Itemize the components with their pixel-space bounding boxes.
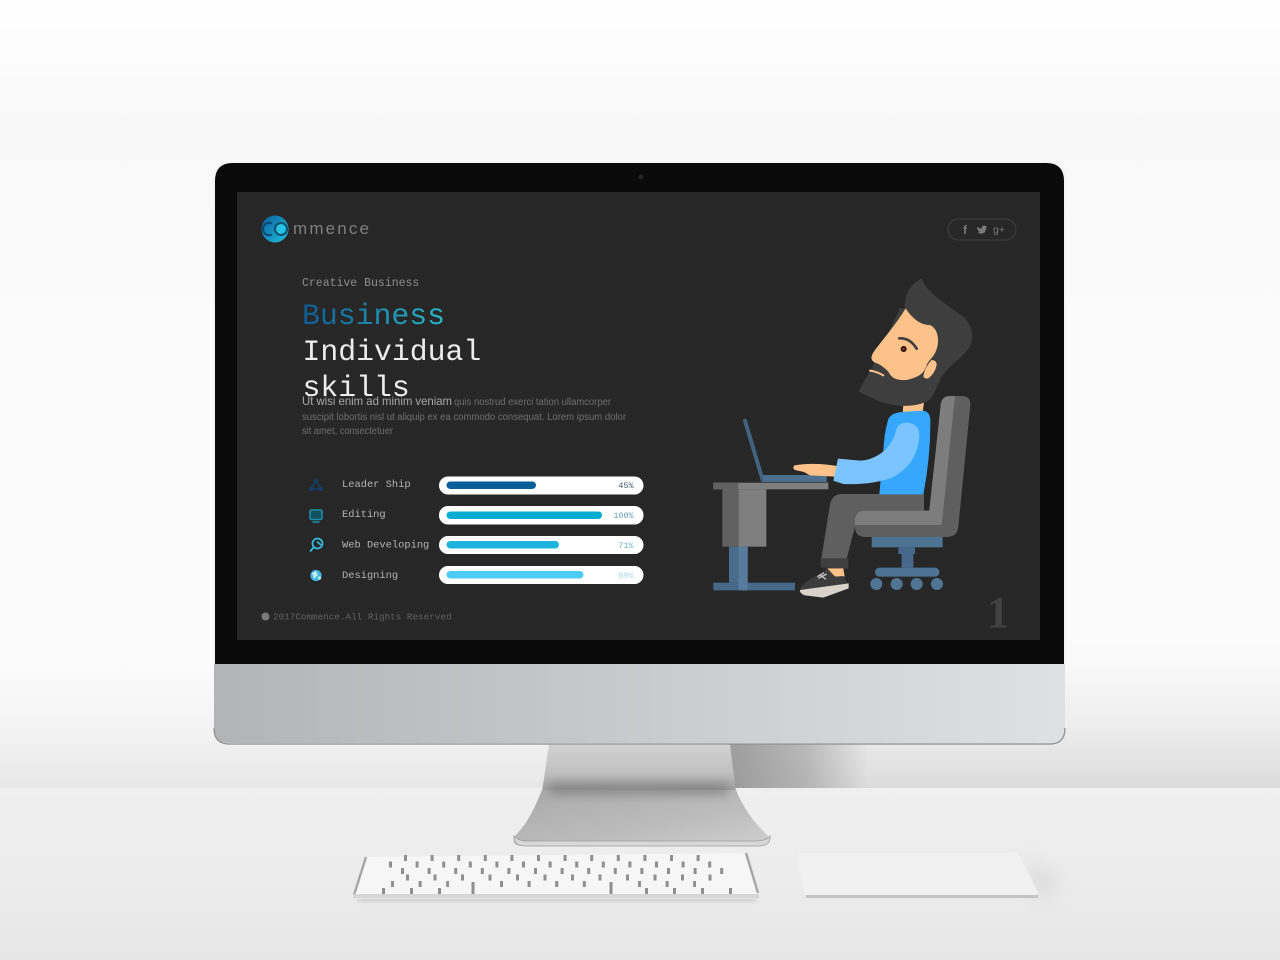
chair [855, 396, 970, 590]
page number: 1 [987, 588, 1009, 637]
track [439, 476, 644, 494]
chair mount [872, 537, 943, 547]
key gaps [382, 858, 734, 894]
skill: Leader Ship [310, 476, 644, 494]
logo letter o [275, 223, 287, 235]
shoe sole [800, 583, 849, 598]
monitor rim [213, 162, 1066, 664]
wall shadow behind stand [728, 744, 868, 789]
line 2: suscipit lobortis nisl ut aliquip ex ea commodo consequat. Lorem ipsum dolor [302, 412, 627, 423]
drawer side [713, 483, 738, 547]
laptop screen [745, 421, 763, 480]
desk [713, 483, 828, 590]
desk leg [729, 547, 748, 583]
logo badge [262, 216, 288, 242]
keyboard body [353, 853, 759, 899]
social icons pill [948, 219, 1016, 240]
label: Designing [342, 570, 398, 582]
skill: Web Developing [310, 536, 644, 554]
leg [821, 494, 924, 559]
trackpad front [806, 895, 1038, 898]
skill: Editing [310, 506, 644, 524]
chin [214, 664, 1065, 743]
illustration: man at desk [713, 278, 972, 598]
eye glint [902, 348, 905, 350]
value: 71% [618, 541, 634, 551]
bar 89% [446, 571, 584, 578]
stand neck [542, 744, 736, 792]
laptop [745, 421, 827, 482]
icon: facebook: f [963, 223, 968, 237]
eyebrow [899, 338, 917, 349]
keyboard shadow [358, 897, 756, 901]
desk surface [0, 788, 1280, 960]
screen [237, 192, 1040, 640]
value: 89% [618, 571, 634, 581]
label: Web Developing [342, 540, 429, 552]
chair back and seat [855, 396, 970, 537]
logo wordmark: mmence [293, 219, 369, 238]
hair and beard [858, 278, 972, 406]
icon: network triangle [310, 480, 322, 490]
shoe [800, 568, 849, 598]
face [871, 308, 938, 380]
neck [903, 403, 924, 414]
footer [262, 612, 452, 622]
line 3: sit amet, consectetuer [302, 426, 394, 437]
icon: palette [310, 570, 322, 581]
eye [901, 346, 907, 352]
trackpad cast shadow [1022, 866, 1056, 896]
black bezel [215, 163, 1064, 665]
keyboard edges [354, 853, 758, 895]
right wall tone [640, 640, 1280, 789]
skill: Designing [310, 566, 644, 584]
logo letter c [263, 223, 272, 235]
eyebrow: Creative Business [302, 277, 419, 290]
line 1: quis nostrud exerci tation ullamcorper [454, 397, 612, 408]
track [439, 536, 644, 554]
bar 45% [446, 482, 536, 489]
ear [923, 360, 937, 379]
trackpad [797, 853, 1056, 898]
label: Editing [342, 509, 386, 521]
hand [793, 464, 837, 477]
icon: twitter [977, 226, 987, 234]
bar 100% [446, 512, 602, 519]
chair light face [855, 396, 955, 525]
paragraph [302, 394, 627, 437]
icon: google plus: g+ [993, 224, 1005, 236]
value: 45% [618, 481, 634, 491]
stand base edge [514, 836, 770, 846]
pill outline [948, 219, 1016, 240]
ankle [827, 568, 845, 577]
logo [262, 216, 369, 242]
arm [833, 423, 919, 484]
keyboard front [353, 894, 759, 898]
head [858, 278, 972, 406]
mouth [870, 371, 883, 375]
title: Business: Business [302, 299, 445, 333]
value: 100% [613, 511, 634, 521]
lead-in: Ut wisi enim ad minim veniam [302, 394, 452, 408]
chair wheels [870, 578, 943, 590]
monitor stand [514, 744, 770, 846]
desk foot [713, 583, 795, 590]
laptop base [763, 475, 827, 482]
stand base [514, 790, 769, 846]
leg highlight [738, 547, 748, 590]
headings [302, 277, 481, 405]
drawer [738, 489, 766, 547]
chin edge [214, 728, 1065, 744]
camera [639, 175, 643, 179]
monitor [213, 162, 1066, 744]
track [439, 506, 644, 524]
chair base bar [875, 568, 939, 577]
chair column [898, 547, 915, 568]
keyboard [353, 853, 759, 901]
label: Leader Ship [342, 479, 411, 491]
shoe upper [800, 568, 849, 593]
title: skills: skills [302, 371, 410, 405]
icon: monitor [310, 510, 322, 522]
stand fold shadow [550, 784, 728, 794]
title: Individual: Individual [302, 335, 481, 369]
track [439, 566, 644, 584]
icon: wrench [310, 538, 322, 552]
shoe laces [817, 573, 827, 579]
copyright icon [262, 612, 270, 620]
trackpad top [797, 853, 1038, 895]
copyright text: 2017Commence.All Rights Reserved [273, 612, 452, 622]
torso [879, 411, 930, 494]
bar 71% [446, 541, 559, 548]
trouser cuff [821, 558, 849, 569]
desk top [713, 483, 828, 489]
